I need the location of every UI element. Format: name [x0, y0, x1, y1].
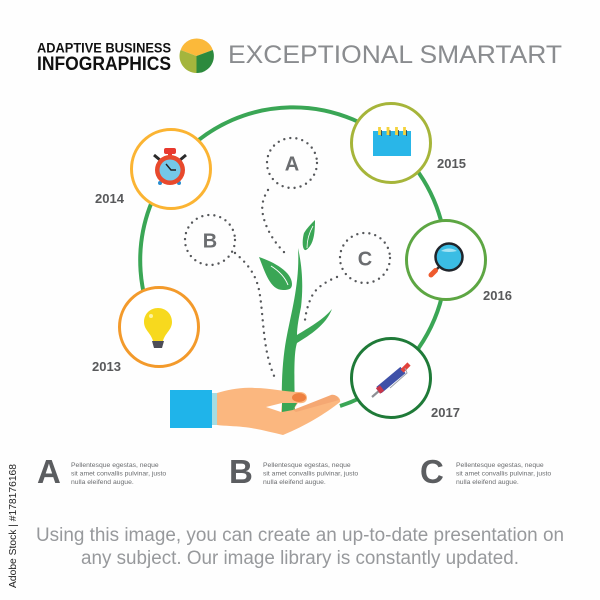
legend item C: nulla eleifend augue. [456, 479, 519, 486]
dotted node C: C [358, 248, 372, 270]
legend item A: A [37, 453, 61, 490]
legend item A: nulla eleifend augue. [71, 479, 134, 486]
thumb highlight [293, 395, 339, 412]
leaf top [303, 220, 315, 250]
hand cuff [170, 390, 212, 428]
label 2013: 2013 [92, 359, 121, 374]
legend item A [37, 453, 166, 490]
fingernail [292, 393, 306, 402]
legend item C: Pellentesque egestas, neque [456, 462, 544, 469]
label 2016: 2016 [483, 288, 512, 303]
dotted node B [185, 215, 235, 265]
side stock id: Adobe Stock | #178176168 [7, 464, 19, 588]
hand [170, 388, 340, 435]
legend item C: sit amet convallis pulvinar, justo [456, 470, 551, 478]
legend item B: Pellentesque egestas, neque [263, 462, 351, 469]
icon: alarm clock [154, 148, 186, 185]
label 2014: 2014 [95, 191, 125, 206]
leaf left [259, 257, 292, 290]
title: EXCEPTIONAL SMARTART [228, 41, 562, 69]
dotted connector B [235, 253, 275, 378]
legend item B: sit amet convallis pulvinar, justo [263, 470, 358, 478]
legend item B: nulla eleifend augue. [263, 479, 326, 486]
icon: pen [372, 364, 409, 397]
green ring arc [140, 107, 446, 406]
plant stem and branch [282, 248, 332, 412]
label 2015: 2015 [437, 156, 466, 171]
hand cuff strip [212, 393, 218, 425]
stem seen through the gap [282, 403, 297, 412]
legend item B: B [229, 453, 253, 490]
dotted node C [340, 233, 390, 283]
node 2013 [92, 288, 198, 374]
hand palm and fingers [217, 388, 340, 435]
footer text [36, 525, 564, 569]
icon: magnifier [431, 244, 462, 275]
hand gap [266, 403, 282, 412]
header: brand text: INFOGRAPHICS [37, 54, 171, 75]
icon: notepad [373, 127, 411, 156]
legend item A: sit amet convallis pulvinar, justo [71, 470, 166, 478]
dotted node B: B [203, 230, 217, 252]
legend item C: C [420, 453, 444, 490]
node 2017 [352, 338, 460, 420]
node 2015 [352, 104, 466, 182]
label 2017: 2017 [431, 405, 460, 420]
footer text: Using this image, you can create an up-to-date presentation on [36, 525, 564, 546]
header: brand text [37, 40, 171, 75]
node 2014 [95, 130, 210, 208]
legend item C [420, 453, 551, 490]
dotted node A: A [285, 154, 299, 176]
dotted connector C [305, 277, 337, 320]
footer text: any subject. Our image library is constantly updated. [81, 548, 519, 569]
header: brand text: ADAPTIVE BUSINESS [37, 40, 171, 56]
dotted connector A [262, 190, 287, 255]
node 2016 [406, 220, 512, 303]
legend item B [229, 453, 358, 490]
icon: light bulb [144, 308, 172, 348]
dotted node A [267, 138, 317, 188]
icon: logo pie [180, 38, 214, 73]
legend item A: Pellentesque egestas, neque [71, 462, 159, 469]
plant [259, 220, 332, 412]
